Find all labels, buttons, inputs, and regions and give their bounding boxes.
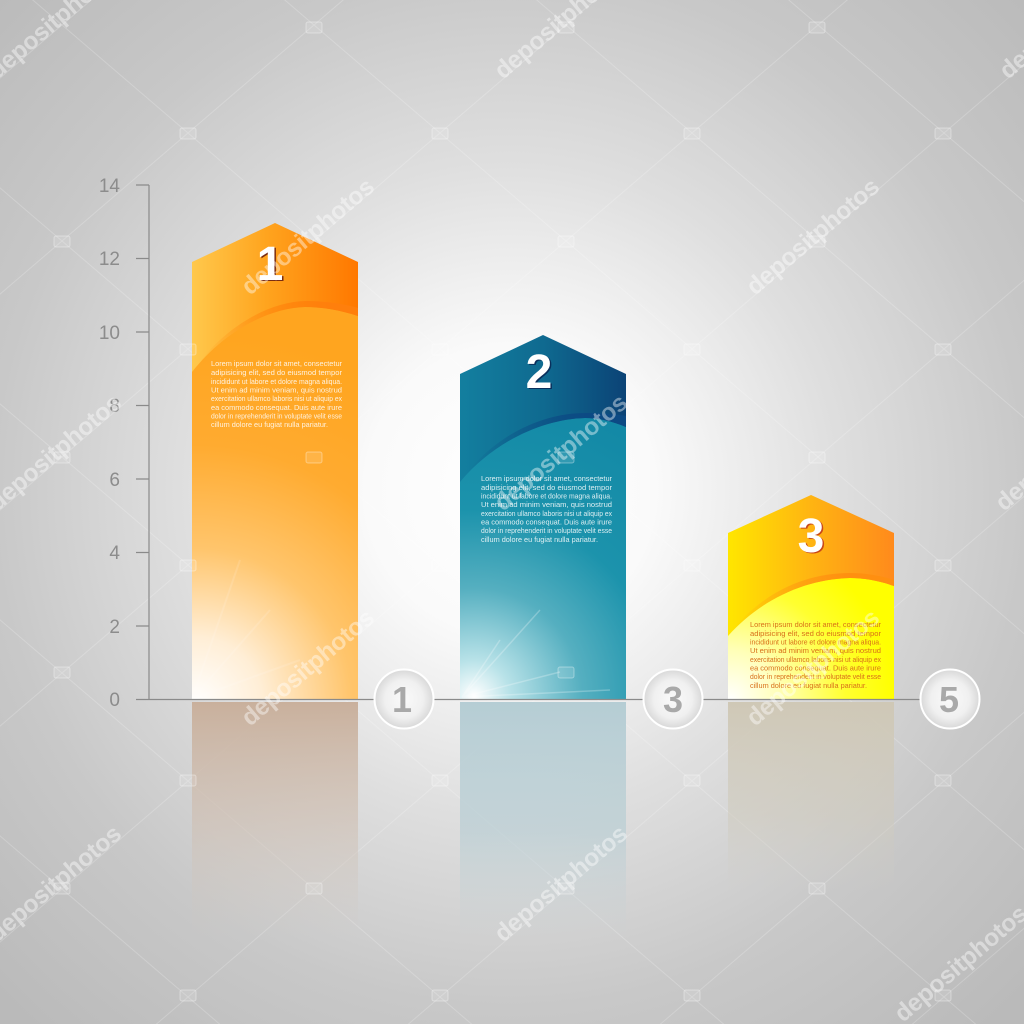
reflection: bar 1 [192,702,358,937]
watermarks: depositphotos [489,389,633,517]
number 2: 2 [526,346,552,399]
y axis: 14 [99,176,120,197]
text block 1: exercitation ullamco laboris nisi ut aliquip ex [211,394,342,403]
text block 1: adipisicing elit, sed do eiusmod tempor [211,368,343,377]
bar 1 [192,223,358,699]
y axis: 8 [109,396,120,417]
y axis: 6 [109,470,120,491]
text block 3: incididunt ut labore et dolore magna aliqua. [750,638,881,646]
text block 3: ea commodo consequat. Duis aute irure [750,664,881,672]
number 2: 2 [527,347,554,400]
bar 2 [460,335,626,699]
text block 3: Lorem ipsum dolor sit amet, consectetur [750,620,882,629]
text block 2: ea commodo consequat. Duis aute irure [481,518,612,526]
bar 3 [728,495,894,699]
number 1: 1 [258,239,285,292]
x marker 5: 5 [939,679,959,720]
text block 1 [211,359,343,429]
text block 3: exercitation ullamco laboris nisi ut aliquip ex [750,655,881,664]
number 3: 3 [799,511,826,564]
y axis: 0 [109,690,120,711]
text block 2: dolor in reprehenderit in voluptate velit esse [481,526,612,535]
text block 2: exercitation ullamco laboris nisi ut aliquip ex [481,509,612,518]
y axis [99,176,149,711]
text block 2: incididunt ut labore et dolore magna aliqua. [481,492,612,500]
watermarks: depositphotos [741,173,885,301]
y axis: 2 [109,617,120,638]
text block 3: cillum dolore eu fugiat nulla pariatur. [750,681,867,690]
text block 3: adipisicing elit, sed do eiusmod tempor [750,629,882,638]
y axis: 4 [109,543,120,564]
x marker 3: 3 [663,679,683,720]
x marker 1: 1 [392,679,412,720]
text block 2: adipisicing elit, sed do eiusmod tempor [481,483,613,492]
text block 2: cillum dolore eu fugiat nulla pariatur. [481,535,598,544]
text block 1: cillum dolore eu fugiat nulla pariatur. [211,420,328,429]
y axis: 12 [99,249,120,270]
watermarks: depositphotos [489,820,633,948]
text block 2: Lorem ipsum dolor sit amet, consectetur [481,474,613,483]
watermarks: depositphotos [236,173,380,301]
text block 1: ea commodo consequat. Duis aute irure [211,403,342,412]
text block 2 [481,474,613,544]
text block 3 [750,620,882,690]
x marker 3 [644,670,702,728]
text block 2: Ut enim ad minim veniam, quis nostrud [481,500,612,509]
text block 1: Ut enim ad minim veniam, quis nostrud [211,386,342,394]
text block 3: Ut enim ad minim veniam, quis nostrud [750,646,881,655]
y axis: 10 [99,323,120,344]
watermarks: depositphotos [741,604,885,732]
text block 1: incididunt ut labore et dolore magna aliqua. [211,377,342,386]
text block 1: dolor in reprehenderit in voluptate velit esse [211,412,342,420]
reflection: bar 2 [460,702,626,937]
watermarks: depositphotos [236,604,380,732]
text block 1: Lorem ipsum dolor sit amet, consectetur [211,359,343,368]
reflection: bar 3 [728,702,894,892]
x axis line [136,698,925,700]
number 1: 1 [257,238,283,291]
text block 3: dolor in reprehenderit in voluptate velit esse [750,672,881,681]
x marker 1 [374,670,434,728]
number 3: 3 [798,510,824,563]
x marker 5 [920,670,980,728]
